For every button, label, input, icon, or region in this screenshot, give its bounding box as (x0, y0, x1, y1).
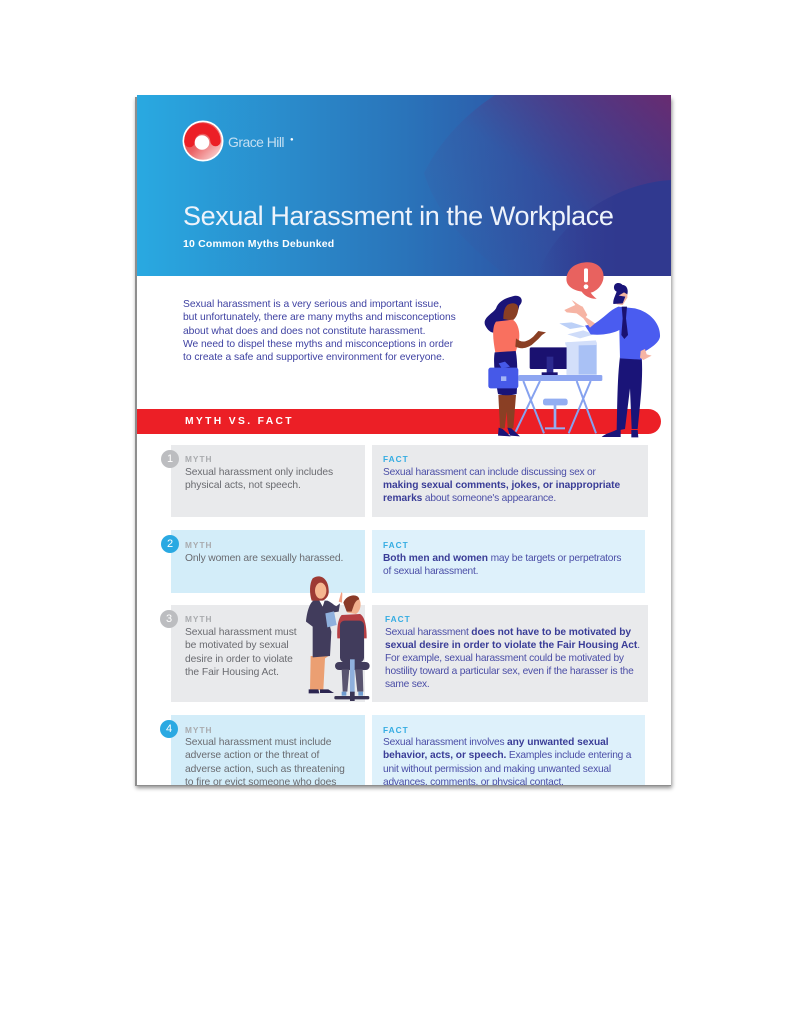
row 2: myth (171, 530, 365, 593)
myth text: Sexual harassment must (185, 627, 297, 638)
fact text: unit without permission and making unwanted sexual (383, 764, 611, 775)
fact text: of sexual harassment. (383, 566, 478, 577)
title: Sexual Harassment in the Workplace (183, 201, 613, 231)
row 4: number: 4 (166, 723, 172, 735)
fact text: hostility toward a particular sex, even if the harasser is the (385, 666, 634, 677)
page shadow (135, 97, 671, 786)
myth text: Sexual harassment must include (185, 737, 331, 748)
myth text: Sexual harassment only includes (185, 467, 333, 478)
label: FACT (383, 725, 409, 735)
row 3: fact (372, 605, 648, 702)
myth text: adverse action, such as threatening (185, 764, 345, 775)
desk (516, 375, 602, 433)
fact text (383, 738, 632, 785)
fact text: Sexual harassment can include discussing sex or (383, 467, 596, 478)
fact text: advances, comments, or physical contact. (383, 777, 564, 788)
row 4: myth (171, 715, 365, 785)
label: MYTH (185, 614, 213, 624)
fact text: Sexual harassment involves any unwanted sexual (383, 737, 609, 748)
header background (137, 95, 671, 276)
subtitle: 10 Common Myths Debunked (183, 238, 334, 250)
logo wordmark: Grace Hill ● (228, 134, 293, 150)
row 2: number (161, 535, 179, 553)
woman (485, 296, 546, 436)
illustration: manager and seated employee (306, 576, 370, 701)
row 3: myth (171, 605, 365, 702)
myth text: be motivated by sexual (185, 640, 289, 651)
intro text: to create a safe and supportive environment for everyone. (183, 352, 445, 363)
row 1: myth (171, 445, 365, 517)
section heading: MYTH VS. FACT (185, 416, 294, 427)
myth text: to fire or evict someone who does (185, 777, 336, 788)
label: MYTH (185, 725, 213, 735)
intro text (183, 300, 456, 362)
intro text: but unfortunately, there are many myths and misconceptions (183, 312, 456, 323)
fact text: Both men and women may be targets or perpetrators (383, 553, 621, 564)
logo (182, 120, 294, 162)
label: FACT (383, 540, 409, 550)
fact text: remarks about someone's appearance. (383, 493, 556, 504)
stack of papers (559, 322, 597, 375)
intro text: Sexual harassment is a very serious and important issue, (183, 299, 442, 310)
fact text (383, 554, 622, 574)
logo mark (182, 120, 224, 162)
myth text: the Fair Housing Act. (185, 667, 279, 678)
man (564, 283, 660, 437)
row 1: number (161, 450, 179, 468)
myth text: desire in order to violate (185, 654, 293, 665)
row 4: fact (372, 715, 645, 785)
speech bubble with exclamation (566, 262, 604, 299)
panel: header banner (137, 95, 671, 276)
label: FACT (383, 454, 409, 464)
fact text (384, 468, 620, 503)
red section band (137, 409, 661, 434)
myth text: Only women are sexually harassed. (185, 553, 343, 564)
intro text: We need to dispel these myths and misconceptions in order (183, 339, 453, 350)
myth text: adverse action or the threat of (185, 750, 319, 761)
row 1: fact (372, 445, 648, 517)
infographic page (137, 95, 671, 785)
seated employee in chair (334, 595, 370, 701)
computer monitor (530, 347, 568, 375)
fact text (385, 628, 640, 687)
label: FACT (385, 614, 411, 624)
row 2: number: 2 (167, 538, 173, 550)
fact text: For example, sexual harassment could be motivated by (385, 653, 624, 664)
row 1: number: 1 (167, 453, 173, 465)
myth text (185, 628, 296, 677)
myth text (186, 468, 333, 490)
fact text: behavior, acts, or speech. Examples include entering a (383, 750, 631, 761)
fact text: Sexual harassment does not have to be motivated by (385, 627, 631, 638)
illustration: office conversation (484, 262, 660, 438)
fact text: sexual desire in order to violate the Fair Housing Act. (385, 640, 640, 651)
myth text (185, 738, 344, 785)
myth text: physical acts, not speech. (185, 480, 301, 491)
fact text: same sex. (385, 679, 430, 690)
label: MYTH (185, 540, 213, 550)
fact text: making sexual comments, jokes, or inappropriate (383, 480, 620, 491)
row 3: number (160, 610, 178, 628)
standing woman (306, 576, 342, 693)
row 3: number: 3 (166, 613, 172, 625)
label: MYTH (185, 454, 213, 464)
intro text: about what does and does not constitute harassment. (183, 326, 425, 337)
row 2: fact (372, 530, 645, 593)
row 4: number (160, 720, 178, 738)
